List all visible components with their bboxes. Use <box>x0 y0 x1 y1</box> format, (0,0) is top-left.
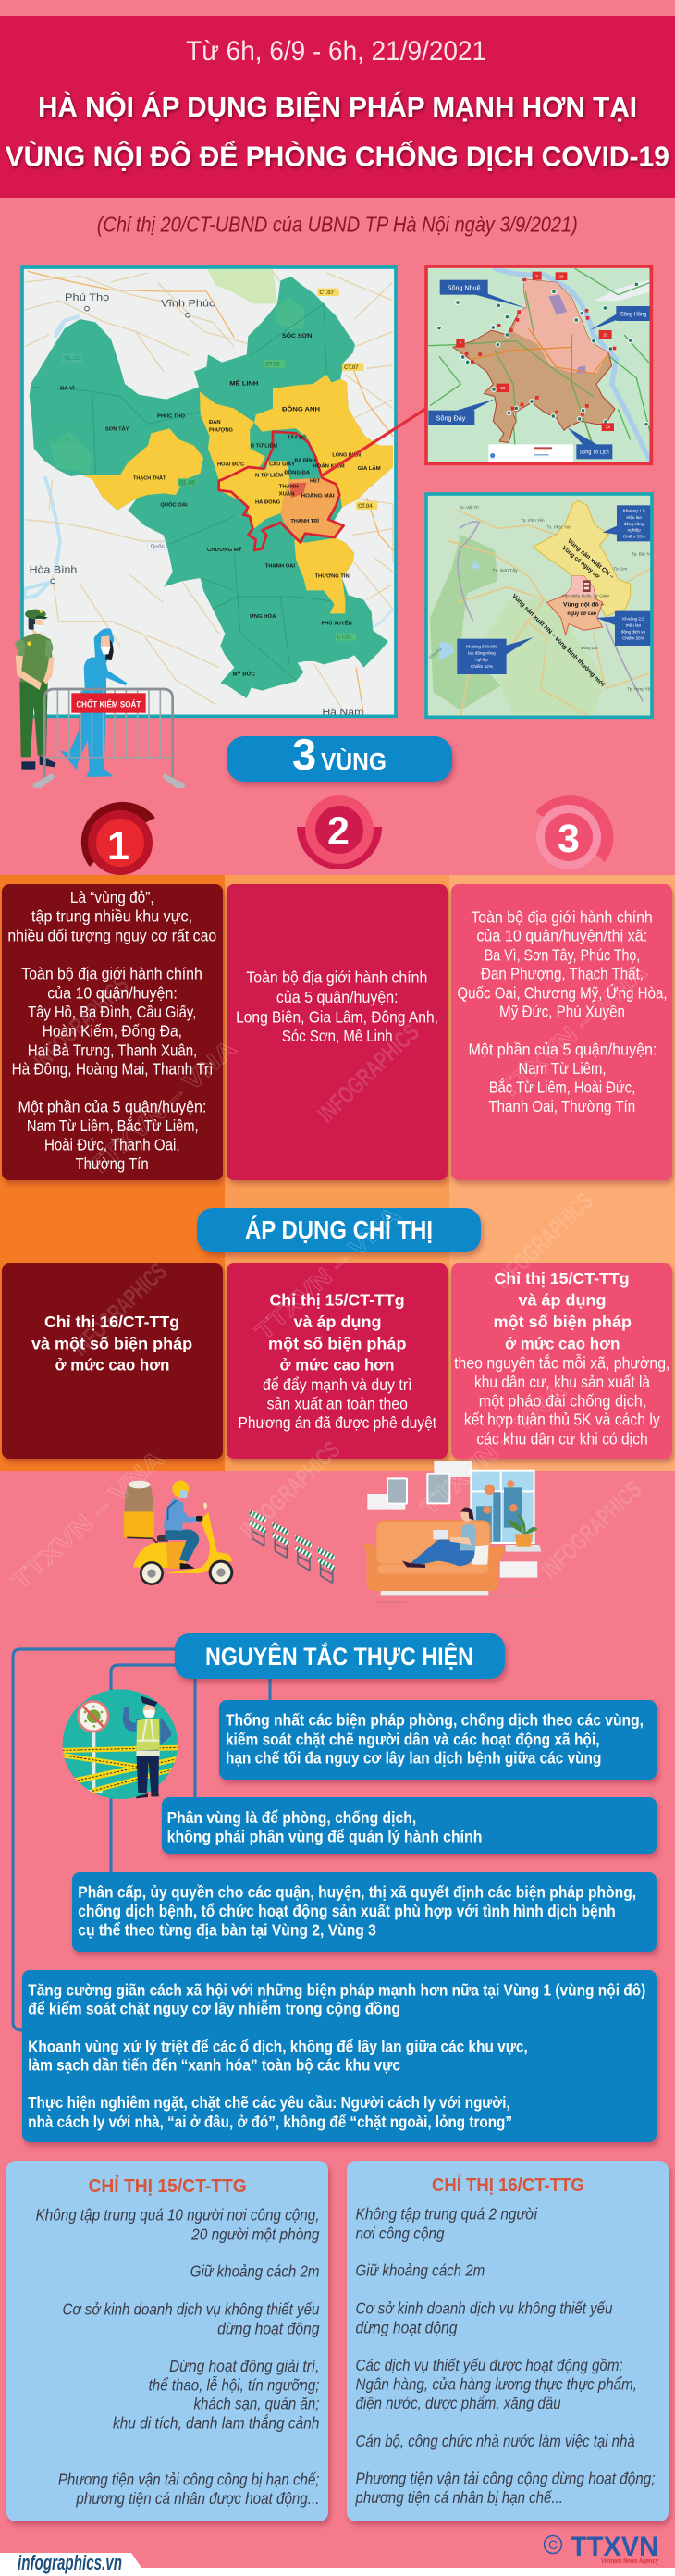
icon: metal barrier: CHỐT KIỂM SOÁT <box>76 698 141 709</box>
numbered red markers <box>456 272 614 431</box>
principle box 2: không phải phân vùng để quản lý hành chính <box>167 1828 482 1846</box>
directive text zone 2 <box>238 1290 436 1432</box>
principle box 1 <box>219 1700 657 1780</box>
place labels: Tx. Phúc Yên <box>547 524 571 529</box>
road badges: CT.07 <box>344 365 359 371</box>
river callouts: Sông Hồng <box>620 313 646 318</box>
panel: directive 15: khách sạn, quán ăn; <box>194 2394 319 2413</box>
heading: implementation principles <box>175 1633 505 1679</box>
labour callouts: Chiếm 12% <box>471 664 493 669</box>
district labels: GIA LÂM <box>358 465 381 472</box>
directive text zone 2: Chỉ thị 15/CT-TTg <box>269 1290 405 1310</box>
heading: apply directive: ÁP DỤNG CHỈ THỊ <box>245 1214 433 1244</box>
place names outside Hanoi <box>30 292 363 719</box>
icon: metal barrier <box>33 689 185 788</box>
title <box>6 91 669 172</box>
watermarks <box>6 957 653 1595</box>
footer: TTXVN logo: C <box>548 2537 558 2552</box>
district labels: THẠCH THẤT <box>133 475 166 481</box>
illustration: guard, medic and checkpoint barrier <box>15 610 185 788</box>
labour callouts: động công <box>624 522 644 526</box>
panel: directive 15: Không tập trung quá 10 người nơi công cộng, <box>36 2205 319 2225</box>
zone 1 text: nhiều đối tượng nguy cơ rất cao <box>7 926 216 944</box>
place labels: Tp. Bắc N <box>632 552 650 557</box>
road badges: CT.05 <box>265 363 280 368</box>
directive text zone 2: sản xuất an toàn theo <box>267 1394 408 1412</box>
place names outside Hanoi: Vĩnh Phúc <box>161 299 215 310</box>
place labels: Tp. Việt Trì <box>460 505 479 510</box>
rotated zone labels: Vùng sản xuất NN – vùng bình thường mới <box>510 592 607 688</box>
illustration: woman with laptop on sofa at home <box>364 1461 541 1602</box>
principle box 2 <box>162 1797 657 1854</box>
river callouts: Sông Nhuệ <box>448 283 481 291</box>
footer white strip <box>0 2553 675 2576</box>
zone 1 text: Hoàn Kiếm, Đống Đa, <box>43 1021 182 1041</box>
zone 1 text: Hoài Đức, Thanh Oai, <box>44 1135 180 1154</box>
Hanoi base green region <box>30 277 393 698</box>
district labels: HOÀI ĐỨC <box>217 461 244 467</box>
directive text zone 3: và áp dụng <box>519 1290 607 1310</box>
road badges: CT.07 <box>319 290 335 296</box>
numbered red markers: 7 <box>460 341 462 346</box>
district labels: PHƯỢNG <box>209 427 234 433</box>
zone 1 text: Hai Bà Trưng, Thanh Xuân, <box>28 1041 197 1059</box>
rotated zone labels: nguy cơ cao <box>567 610 596 617</box>
rotated zone labels: Vùng nội đô – <box>563 601 605 608</box>
badge 2: 2 <box>327 809 350 854</box>
inner city zone <box>547 576 603 635</box>
main map of Hanoi zones <box>22 267 396 719</box>
district labels: MÊ LINH <box>229 378 259 387</box>
district labels: PHÚ XUYÊN <box>321 619 352 626</box>
main map of Hanoi zones: Vườn Quốc <box>43 423 92 432</box>
badge 1 <box>81 802 155 875</box>
labour callouts: lao động nông <box>468 651 496 656</box>
panel: directive 15: Dừng hoạt động giải trí, <box>169 2357 319 2375</box>
district labels: PHÚC THỌ <box>157 413 186 420</box>
zone 3 text: Nam Từ Liêm, <box>519 1059 607 1078</box>
district labels: QUỐC OAI <box>160 502 188 509</box>
district labels: LONG BIÊN <box>332 451 361 459</box>
red inner city boundary <box>219 432 344 550</box>
labour callouts: triệu lao <box>626 515 642 520</box>
labour callouts: nghiệp <box>628 528 641 533</box>
directive text zone 3 <box>454 1269 669 1448</box>
zone 2 text: Toàn bộ địa giới hành chính <box>246 968 427 986</box>
place labels: Tx. Sơn Tây <box>492 568 518 573</box>
panel: directive 16: Giữ khoảng cách 2m <box>356 2261 485 2280</box>
yellow zone Thach That <box>81 428 203 511</box>
map legend <box>488 444 573 462</box>
road badges: CT.01 <box>338 635 352 641</box>
labour callouts: Khoảng 2,5 <box>622 617 644 622</box>
panel: directive 15: Cơ sở kinh doanh dịch vụ không thiết yếu <box>63 2299 319 2319</box>
panel: directive 15: Giữ khoảng cách 2m <box>190 2262 319 2281</box>
place labels: Đông Lạc <box>581 646 599 650</box>
labour callouts: Chiếm 55% <box>622 635 644 640</box>
district labels: HOÀN KIẾM <box>313 463 345 470</box>
district labels: THANH <box>279 485 299 490</box>
panel: directive 15: 20 người một phòng <box>190 2225 319 2243</box>
district labels: THANH TRÌ <box>290 517 319 524</box>
labour callouts <box>457 505 651 674</box>
numbered red markers: 29 <box>603 332 608 337</box>
district labels: HBT <box>310 478 321 484</box>
zone 1 text: Là “vùng đỏ”, <box>70 888 154 906</box>
district labels: ĐÔNG ANH <box>282 405 320 413</box>
zone 1 text: của 10 quận/huyện: <box>47 983 178 1002</box>
zone 1 text <box>7 888 216 1173</box>
inset map: economic regions <box>426 494 652 717</box>
badge 3: 3 <box>558 817 580 861</box>
principle box 2: Phân vùng là để phòng, chống dịch, <box>167 1809 416 1827</box>
labour callouts: Khoảng 1,5 <box>623 509 645 513</box>
watermarks: INFOGRAPHICS <box>66 1257 172 1361</box>
icon: medic in blue suit <box>60 628 135 777</box>
icon: traffic police at checkpoint <box>62 1689 178 1799</box>
rotated zone labels <box>510 537 616 688</box>
watermarks: INFOGRAPHICS <box>28 970 134 1074</box>
numbered red markers: 33 <box>500 386 506 390</box>
place labels: Sông Đà <box>427 647 443 660</box>
district labels: SƠN TÂY <box>105 426 129 433</box>
inset map: rivers <box>426 266 651 463</box>
main map of Hanoi zones: Gia Ba Vì <box>48 435 87 444</box>
place labels: Tp. Vĩnh Yên <box>521 518 545 523</box>
panel: directive 16 <box>347 2161 669 2521</box>
district labels: CẦU GIẤY <box>269 461 295 467</box>
zone cards <box>2 884 672 1180</box>
district labels: THANH OAI <box>265 564 295 570</box>
numbered red markers: 29 <box>558 274 564 278</box>
district labels: XUÂN <box>279 491 294 498</box>
header band <box>0 16 675 198</box>
directive text zone 3: ở mức cao hơn <box>505 1334 620 1352</box>
connector lines from heading to principle boxes <box>13 1649 270 2030</box>
principle box 4: để kiểm soát chặt nguy cơ lây nhiễm trong cộng đồng <box>28 2000 400 2018</box>
labour callouts: Khoảng 500.000 <box>466 645 497 649</box>
numbered red markers: 5 <box>535 274 538 278</box>
district labels: MỸ ĐỨC <box>233 672 255 678</box>
watermarks: INFOGRAPHICS <box>488 1187 598 1294</box>
heading: apply directive <box>197 1208 481 1252</box>
rotated zone labels: Vùng sản xuất CN – <box>566 537 616 581</box>
connector line from main map to inset <box>321 408 427 476</box>
district labels: SÓC SƠN <box>282 331 313 339</box>
yellow zone Dan Phuong Hoai Duc <box>200 391 265 479</box>
zone 2 text: Sóc Sơn, Mê Linh <box>282 1027 393 1045</box>
district labels: BA VÌ <box>60 385 75 392</box>
heading: directive 15: CHỈ THỊ 15/CT-TTG <box>88 2175 247 2197</box>
footer: TTXVN logo: TTXVN <box>571 2532 658 2562</box>
district labels: ỨNG HÒA <box>250 612 276 620</box>
directive text zone 2: một số biện pháp <box>268 1334 406 1352</box>
zone 3 text <box>457 907 668 1115</box>
zone 1 text: Toàn bộ địa giới hành chính <box>21 964 202 983</box>
principle box 4: làm sạch dần tiến đến “xanh hóa” toàn bộ các khu vực <box>28 2056 400 2075</box>
district labels: B TỪ LIÊM <box>251 441 277 449</box>
watermarks: TTXVN – VNA <box>6 1444 169 1595</box>
footer: TTXVN logo: Vietnam News Agency <box>601 2557 659 2565</box>
directive text zone 1: Chỉ thị 16/CT-TTg <box>44 1313 179 1331</box>
district labels: BA ĐÌNH <box>294 456 316 463</box>
numbered red markers: 34 <box>606 425 610 429</box>
heading: implementation principles: NGUYÊN TẮC THỰC HIỆN <box>205 1642 473 1670</box>
river callouts: Sông Đáy <box>436 413 466 422</box>
place labels: Văn Miếu Quốc Tử Giám <box>562 592 609 598</box>
panel: directive 16: dừng hoạt động <box>356 2318 457 2336</box>
district labels: THƯỜNG TÍN <box>315 573 350 580</box>
watermarks: TTXVN – VNA <box>82 1034 242 1181</box>
zone 2 text: của 5 quận/huyện: <box>276 988 399 1006</box>
district labels: HOÀNG MAI <box>301 493 335 499</box>
zone 1 text: tập trung nhiều khu vực, <box>31 906 192 926</box>
badge 2 <box>297 795 382 869</box>
badge 1: 1 <box>107 824 129 869</box>
badge 3 <box>535 795 613 869</box>
panel: directive 15: khu di tích, danh lam thắng cảnh <box>113 2413 319 2432</box>
labour callouts: triệu lao <box>626 623 642 628</box>
district labels: CHƯƠNG MỸ <box>207 547 242 553</box>
district labels: TÂY HỒ <box>288 434 307 440</box>
illustration: road barriers <box>250 1510 335 1583</box>
directive text zone 2: để đẩy mạnh và duy trì <box>263 1375 412 1394</box>
yellow risk zone <box>534 500 631 616</box>
rotated zone labels: Vùng có nguy cơ <box>560 545 601 580</box>
district labels: HÀ ĐÔNG <box>255 498 281 505</box>
watermarks: TTXVN – VNA <box>415 1376 571 1521</box>
place labels: Tp. Hưng Yê <box>627 686 651 691</box>
panel: directive 16: nơi công cộng <box>356 2224 444 2242</box>
place labels <box>427 505 651 691</box>
district labels: ĐỐNG ĐA <box>284 470 310 476</box>
labour callouts: động dịch vụ <box>621 629 646 634</box>
zone 1 text: Một phần của 5 quận/huyện: <box>18 1097 206 1116</box>
inner zone fills <box>219 467 289 529</box>
place names outside Hanoi: Phú Thọ <box>65 292 109 303</box>
directive text zone 2: và áp dụng <box>294 1313 381 1331</box>
zone 1 text: Nam Từ Liêm, Bắc Từ Liêm, <box>27 1116 199 1135</box>
directive text zone 1: và một số biện pháp <box>31 1334 192 1352</box>
zone 2 text: Long Biên, Gia Lâm, Đông Anh, <box>236 1007 438 1026</box>
district labels <box>60 331 381 678</box>
principle box 3 <box>72 1872 657 1952</box>
principle box 4 <box>22 1970 657 2142</box>
road badges <box>63 289 377 641</box>
orange column backgrounds <box>0 875 675 1471</box>
panel: directive 15: dừng hoạt động <box>217 2319 319 2337</box>
road badges: CT.04 <box>358 504 373 510</box>
directive cards <box>2 1263 672 1459</box>
zone 2 text <box>236 968 438 1045</box>
directive text zone 1: ở mức cao hơn <box>55 1355 169 1374</box>
watermarks: TTXVN – VNA <box>493 957 653 1104</box>
footer: infographics.vn: infographics.vn <box>18 2551 122 2574</box>
heading: 3 zones <box>227 730 452 782</box>
river callouts <box>428 280 651 459</box>
place names outside Hanoi: Hòa Bình <box>30 565 77 576</box>
watermarks: INFOGRAPHICS <box>234 1436 345 1544</box>
zone 1 text: Hà Đông, Hoàng Mai, Thanh Trì <box>12 1059 213 1078</box>
road badges: QL.08 <box>179 480 195 486</box>
heading: directive 16: CHỈ THỊ 16/CT-TTG <box>432 2174 584 2196</box>
yellow zone Thuong Tin <box>294 538 354 613</box>
watermarks: INFOGRAPHICS <box>312 1017 424 1128</box>
directive text zone 2: ở mức cao hơn <box>280 1355 394 1374</box>
river callouts: Sông Tô Lịch <box>580 450 609 456</box>
heading: 3 zones: 3 <box>292 730 316 779</box>
labour callouts: Chiếm 33% <box>623 535 645 539</box>
place names outside Hanoi: Hà Nam <box>322 708 363 719</box>
footer: TTXVN logo <box>544 2532 659 2565</box>
principle box 3: cụ thể theo từng địa bàn tại Vùng 2, Vùng 3 <box>78 1921 376 1939</box>
district labels: ĐAN <box>209 420 221 425</box>
icon: border guard <box>15 610 56 770</box>
panel: directive 16: Không tập trung quá 2 người <box>356 2204 538 2224</box>
yellow zone Dong Anh Gia Lam <box>254 375 393 507</box>
place labels: Từ Sơn <box>613 567 628 572</box>
heading: 3 zones: VÙNG <box>321 747 387 775</box>
date line: Từ 6h, 6/9 - 6h, 21/9/2021 <box>186 36 486 67</box>
district labels: N TỪ LIÊM <box>255 471 283 478</box>
directive text zone 2: Phương án đã được phê duyệt <box>238 1413 436 1432</box>
panel: directive 15 <box>6 2161 328 2521</box>
zone 1 text: Tây Hồ, Ba Đình, Cầu Giấy, <box>28 1003 196 1021</box>
directive text zone 1 <box>31 1313 192 1374</box>
panel: directive 15: phương tiện cá nhân được hoạt động... <box>76 2489 319 2508</box>
illustration: delivery scooter <box>124 1481 233 1585</box>
watermarks: TTXVN – VNA <box>250 1201 406 1345</box>
zone 1 text: Thường Tín <box>75 1154 149 1173</box>
panel: directive 15: thể thao, lễ hội, tín ngưỡng; <box>149 2375 319 2394</box>
road badges: Quốc <box>151 544 166 550</box>
inner city polygon <box>453 279 615 443</box>
road badges: QL.32 <box>64 356 80 362</box>
panel: directive 15: Phương tiện vận tải công cộng bị hạn chế; <box>58 2470 319 2488</box>
labour callouts: nghiệp <box>475 658 488 662</box>
